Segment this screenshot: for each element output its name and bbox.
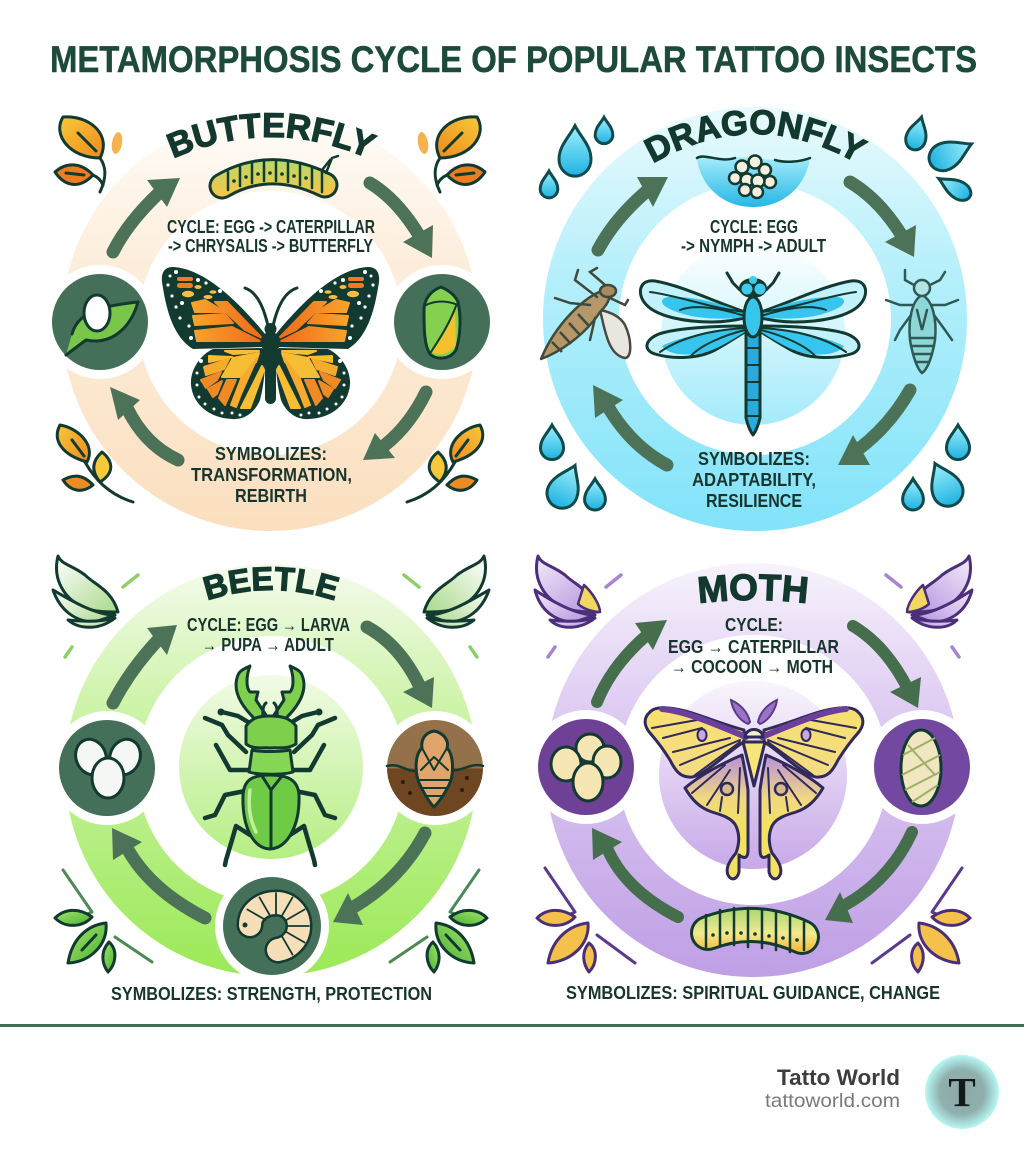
stage: egg on leaf [43, 265, 157, 379]
stage: cocoon [865, 710, 979, 824]
moth leaves bottom right [872, 868, 970, 972]
beetle heading: BEETLE [202, 566, 340, 601]
beetle centre glow [179, 675, 363, 859]
footer brand [765, 1055, 999, 1129]
beetle leaves bottom right [390, 870, 487, 972]
moth centre glow [659, 681, 847, 869]
brand logo: T [948, 1069, 976, 1115]
footer rule [0, 1024, 1024, 1027]
butterfly cycle text: CYCLE: EGG -> CATERPILLAR [167, 217, 375, 237]
beetle wing ornament top right [404, 556, 489, 657]
dragonfly cycle text: -> NYMPH -> ADULT [681, 236, 826, 256]
dragonfly main illustration [640, 273, 866, 435]
brand url: tattoworld.com [765, 1090, 900, 1112]
stage: moth eggs [529, 710, 643, 824]
arrows: beetle cycle [112, 625, 434, 925]
panel: butterfly [52, 112, 490, 531]
beetle cycle ring [101, 600, 441, 940]
butterfly heading: BUTTERFLY [166, 112, 378, 158]
butterfly symbolism text: TRANSFORMATION, [191, 465, 352, 485]
butterfly cycle ring [100, 153, 440, 493]
beetle cycle text: → PUPA → ADULT [202, 635, 334, 655]
dragonfly symbolism text [692, 449, 816, 511]
stage: nymph emerging [541, 268, 630, 359]
arrows: dragonfly cycle [593, 177, 916, 465]
moth wing ornament top left [535, 556, 621, 657]
stage: eggs in water [697, 156, 810, 207]
panel: dragonfly [538, 107, 974, 531]
moth wing ornament top right [886, 556, 972, 657]
butterfly leaves top right [416, 117, 485, 192]
butterfly main illustration [162, 267, 379, 419]
arrows: butterfly cycle [110, 178, 433, 460]
caterpillar: moth stage [706, 908, 804, 952]
butterfly cycle text: -> CHRYSALIS -> BUTTERFLY [168, 236, 373, 256]
moth heading: MOTH [698, 574, 808, 604]
beetle cycle text [187, 615, 350, 655]
stage: chrysalis [385, 265, 499, 379]
moth cycle text: CYCLE: [725, 615, 783, 635]
butterfly leaves top left [55, 117, 124, 192]
moth cycle text: → COCOON → MOTH [671, 657, 833, 677]
beetle main illustration [205, 666, 335, 865]
beetle symbolism text: SYMBOLIZES: STRENGTH, PROTECTION [111, 984, 432, 1004]
butterfly symbolism text: SYMBOLIZES: [215, 444, 327, 464]
moth cycle text [668, 615, 839, 677]
stage: beetle eggs [50, 711, 164, 825]
stage: larva [215, 869, 329, 983]
arrows: moth cycle [592, 620, 921, 923]
dragonfly symbolism text: SYMBOLIZES: [698, 449, 810, 469]
moth symbolism text: SYMBOLIZES: SPIRITUAL GUIDANCE, CHANGE [566, 983, 940, 1003]
dragonfly symbolism text: RESILIENCE [706, 491, 802, 511]
stage: nymph [886, 270, 958, 373]
dragonfly symbolism text: ADAPTABILITY, [692, 470, 816, 490]
beetle wing ornament top left [53, 556, 138, 657]
beetle cycle text: CYCLE: EGG → LARVA [187, 615, 350, 635]
butterfly symbolism text [191, 444, 352, 506]
moth leaves bottom left [537, 868, 635, 972]
caterpillar [222, 156, 338, 192]
dragonfly centre glow [661, 241, 845, 425]
dragonfly cycle ring [581, 145, 929, 493]
brand logo [925, 1055, 999, 1129]
dragonfly cycle text [681, 217, 826, 256]
dragonfly heading: DRAGONFLY [643, 110, 869, 163]
butterfly leaves bottom left [57, 425, 133, 502]
stage: pupa in soil [378, 711, 492, 825]
water drops [540, 115, 977, 513]
butterfly leaves bottom right [407, 425, 483, 502]
panel: beetle [52, 554, 490, 1004]
butterfly cycle text [167, 217, 375, 256]
moth cycle text: EGG → CATERPILLAR [668, 637, 839, 657]
butterfly symbolism text: REBIRTH [235, 486, 307, 506]
beetle leaves bottom left [55, 870, 152, 972]
brand name: Tatto World [777, 1065, 900, 1090]
panel: moth [534, 554, 974, 1003]
moth main illustration [645, 700, 863, 879]
moth cycle ring [582, 599, 924, 941]
dragonfly cycle text: CYCLE: EGG [710, 217, 798, 237]
